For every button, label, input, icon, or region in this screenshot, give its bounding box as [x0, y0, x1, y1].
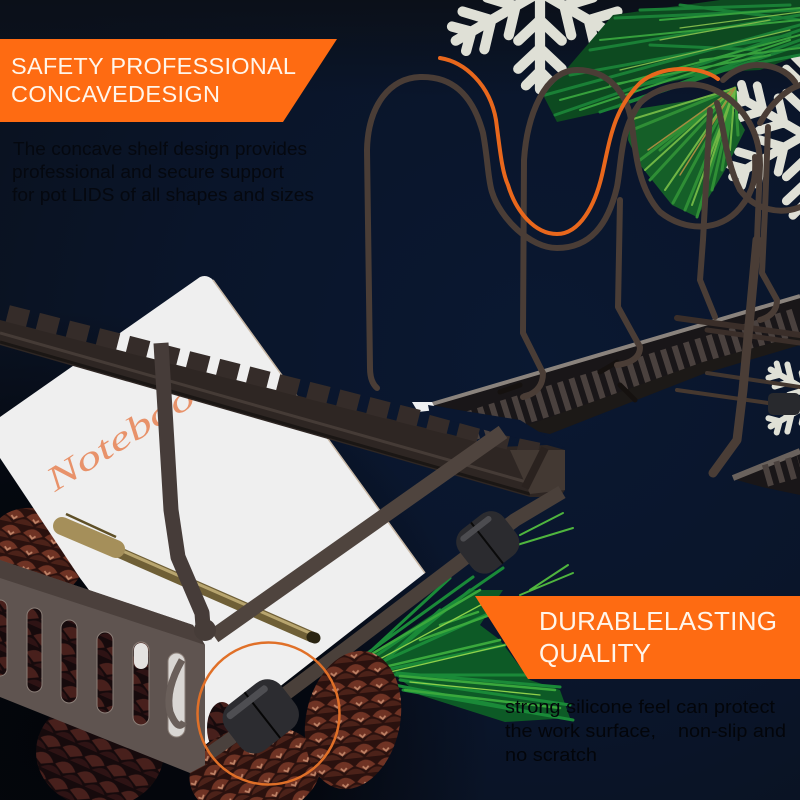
body text: concave shelf: professional and secure support: [12, 162, 284, 182]
background notch over rail: [428, 405, 565, 448]
body text: concave shelf: The concave shelf design provides: [13, 139, 307, 159]
tray slots: [0, 600, 185, 737]
banner: safety professional: [0, 39, 337, 122]
bottom tray: [0, 560, 216, 773]
body text: silicone: the work surface, non-slip and: [505, 721, 786, 741]
pine branch: bottom: [365, 513, 573, 722]
wire rack: rear rail: [412, 296, 800, 495]
lower rods: [161, 343, 562, 728]
notebook: [0, 276, 425, 745]
tray hook: [169, 660, 184, 725]
connector: front: [210, 672, 306, 761]
banner heading: SAFETY PROFESSIONAL: [11, 53, 296, 79]
comb rail: [0, 312, 565, 497]
front pine cones: [182, 642, 414, 800]
body text: silicone: no scratch: [505, 745, 597, 765]
banner heading: QUALITY: [539, 638, 651, 668]
orange accent curve: [440, 58, 718, 234]
pine branch: top right: [543, 0, 800, 217]
wire rack: side rods and connector: [500, 318, 800, 415]
banner heading: DURABLELASTING: [539, 606, 777, 636]
notebook title: Notebook: [38, 366, 221, 500]
body text: concave shelf: for pot LIDS of all shapes and sizes: [12, 185, 314, 205]
wire rack: curved pot lid holders: [367, 65, 800, 473]
connector: upper: [450, 505, 526, 580]
snowflakes: [445, 0, 800, 455]
body text: silicone: strong silicone feel can protect: [505, 697, 775, 717]
rear pine cones: [0, 491, 164, 800]
banner heading: CONCAVEDESIGN: [11, 81, 220, 107]
banner: durable quality: [475, 596, 800, 679]
callout circle: [198, 642, 340, 784]
pen: [62, 514, 315, 638]
